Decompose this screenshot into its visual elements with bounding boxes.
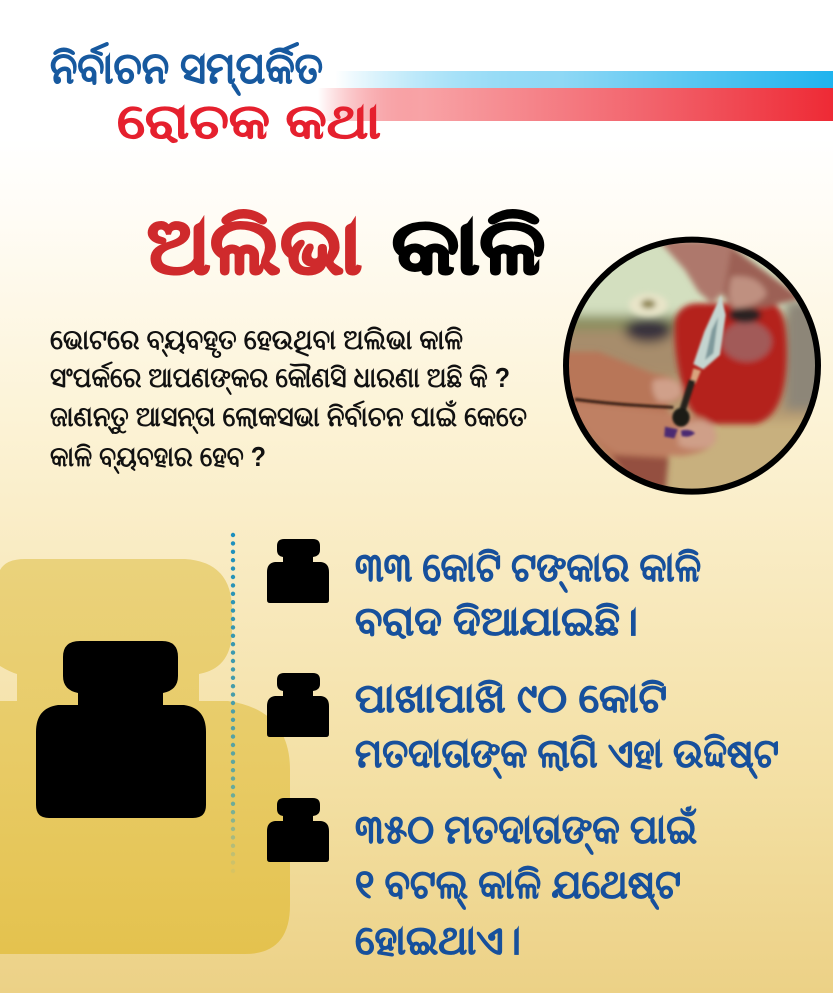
circular photo: inked finger bbox=[563, 236, 821, 495]
icon: bottle bullet 3 bbox=[267, 798, 329, 862]
fact 3: ୩୫୦ ମତଦାତାଙ୍କ ପାଇଁ bbox=[355, 806, 697, 855]
title gradient bars bbox=[318, 71, 833, 121]
intro paragraph: ଜାଣନ୍ତୁ ଆସନ୍ତା ଲୋକସଭା ନିର୍ବାଚନ ପାଇଁ କେତେ bbox=[50, 400, 527, 435]
fact 3: ୧ ବଟଲ୍ କାଳି ଯଥେଷ୍ଟ bbox=[355, 863, 681, 910]
fact 1: ବରାଦ ଦିଆଯାଇଛି। bbox=[355, 600, 638, 644]
heading bbox=[147, 202, 545, 290]
fact 3 bbox=[355, 806, 697, 963]
fact 2: ମତଦାତାଙ୍କ ଲାଗି ଏହା ଉଦ୍ଦିଷ୍ଟ bbox=[355, 732, 779, 779]
large faded bottle silhouette bbox=[0, 559, 290, 954]
title line 1: ନିର୍ବାଚନ ସମ୍ପର୍କିତ bbox=[50, 42, 323, 96]
icon: large black bottle bbox=[36, 641, 206, 818]
heading: ଅଲିଭା bbox=[147, 202, 362, 290]
fact 1 bbox=[355, 546, 701, 644]
intro paragraph: ସଂପର୍କରେ ଆପଣଙ୍କର କୌଣସି ଧାରଣା ଅଛି କି ? bbox=[50, 361, 510, 396]
icon: bottle bullet 2 bbox=[267, 673, 329, 737]
fact 1: ୩୩ କୋଟି ଟଙ୍କାର କାଳି bbox=[355, 546, 701, 593]
fact 3: ହୋଇଥାଏ। bbox=[355, 919, 521, 963]
intro paragraph bbox=[50, 324, 527, 475]
fact 2: ପାଖାପାଖି ୯୦ କୋଟି bbox=[355, 677, 667, 721]
intro paragraph: କାଳି ବ୍ୟବହାର ହେବ ? bbox=[50, 441, 266, 475]
dotted divider bbox=[231, 535, 235, 875]
icon: bottle bullet 1 bbox=[267, 539, 329, 603]
intro paragraph: ଭୋଟରେ ବ୍ୟବହୃତ ହେଉଥିବା ଅଲିଭା କାଳି bbox=[50, 324, 463, 358]
heading: କାଳି bbox=[392, 202, 545, 290]
title line 2: ରୋଚକ କଥା bbox=[117, 95, 381, 149]
fact 2 bbox=[355, 677, 779, 779]
